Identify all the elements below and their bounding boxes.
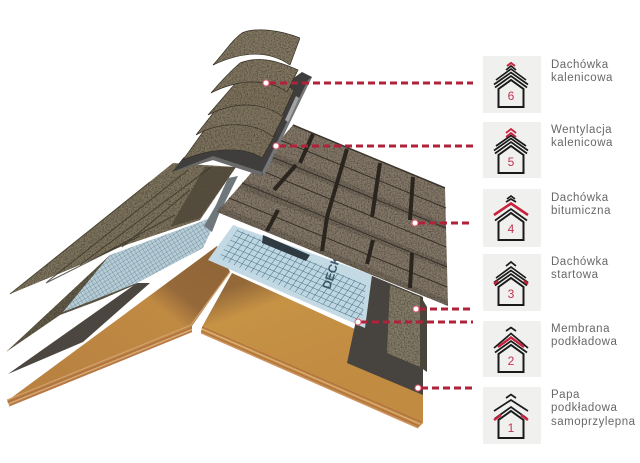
right shingles [217,125,448,306]
left underlayment sheet [8,283,150,374]
legend 2: underlay membrane [483,321,541,377]
right membrane with grid: DECK [320,254,343,291]
label 1: podkładowa [551,402,617,414]
label 2: podkładowa [551,336,617,348]
left shingles [10,163,236,294]
legend 5: ridge ventilation [483,122,541,178]
legend 6: ridge tile: 6 [508,89,515,103]
right underlayment sheet [347,275,423,395]
legend 3: starter tile [483,254,541,311]
label 4: bitumiczna [551,205,611,217]
label 6: kalenicowa [551,72,613,84]
left membrane [63,176,238,312]
label 6: Dachówka [551,59,609,71]
shading bands [217,151,448,306]
right starter strip [387,285,427,372]
legend 6: ridge tile [483,56,541,113]
label 1: samoprzylepna [551,416,636,428]
label 4: Dachówka [551,192,609,204]
label 3: startowa [551,269,599,281]
right membrane with grid [208,225,372,328]
label 1: Papa [551,389,580,401]
callout lines and dots [263,80,473,391]
ridge caps [183,30,300,160]
legend 3: starter tile: 3 [508,287,515,301]
label 3: Dachówka [551,256,609,268]
legend 4: bitumen shingle: 4 [508,222,515,236]
legend 2: underlay membrane: 2 [508,354,515,368]
wood deck: left slope [7,246,230,406]
legend 1: self-adhesive underlay: 1 [508,421,515,435]
legend 5: ridge ventilation: 5 [508,155,515,169]
legend 4: bitumen shingle [483,189,541,247]
wood deck: right slope [201,273,423,428]
label 5: kalenicowa [551,137,613,149]
left starter shingle layer [6,255,137,352]
legend 1: self-adhesive underlay [483,387,541,444]
label 2: Membrana [551,323,610,335]
label 5: Wentylacja [551,124,612,136]
ridge vent [172,72,312,176]
